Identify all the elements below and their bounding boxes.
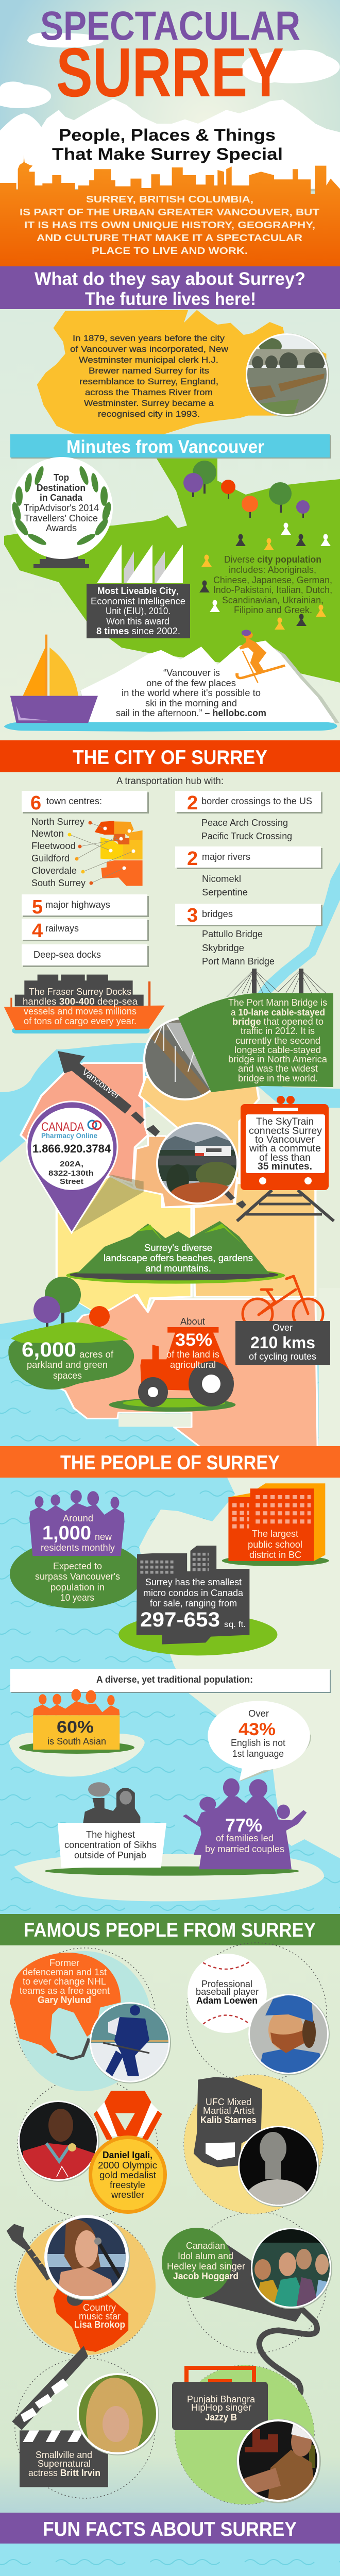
people icons (199, 522, 331, 630)
diverse population text: Chinese, Japanese, German, (213, 575, 332, 585)
card: 2 major rivers: major rivers (202, 852, 250, 862)
panel: famous people (0, 1914, 340, 2513)
person: Kalib Starnes: UFC Mixed (206, 2097, 251, 2107)
diverse population text: Diverse city population (224, 554, 321, 565)
ski mountain and quote: one of the few places (146, 678, 236, 688)
award badge: Travellers' Choice (24, 513, 98, 523)
cycling routes box: Over (273, 1323, 293, 1333)
town centre names: South Surrey (31, 878, 86, 888)
person: Jazzy B (172, 2365, 321, 2504)
new residents stat: new (95, 1532, 112, 1542)
card: 5 major highways: 5 (32, 896, 43, 918)
award badge: Destination (37, 483, 86, 493)
white sails building (97, 545, 183, 583)
person: Jacob Hoggard: Jacob Hoggard (173, 2271, 239, 2281)
award badge: Awards (46, 523, 77, 533)
person: Jazzy B: HipHop singer (191, 2402, 251, 2413)
bubble: 43% English (208, 1701, 311, 1781)
banner: diverse population: A diverse, yet traditional population: (96, 1674, 253, 1685)
SkyTrain icon: 35 minutes. (258, 1161, 312, 1172)
parkland stat with trees: spaces (53, 1370, 82, 1381)
logo: Canada Pharmacy Online (41, 1120, 101, 1140)
heading band (0, 266, 340, 309)
card: 3 bridges: bridges (202, 909, 233, 919)
diverse population text: Indo-Pakistani, Italian, Dutch, (213, 585, 332, 595)
guitar (7, 2224, 128, 2352)
lower island (14, 1854, 324, 1901)
green mountain landscape: Surrey's diverse (144, 1243, 212, 1253)
yellow map with history text: resemblance to Surrey, England, (79, 377, 218, 386)
new residents stat (10, 1490, 144, 1608)
yellow map with history text: of Vancouver was incorporated, New (70, 345, 228, 354)
clouds (0, 32, 340, 108)
card: deep-sea docks: Deep-sea docks (33, 950, 101, 960)
bubble: 43% English: 1st language (232, 1749, 284, 1759)
intro text: IS PART OF THE URBAN GREATER VANCOUVER, BUT (20, 207, 319, 217)
town centre names: Newton (31, 828, 64, 839)
bubble: 43% English: English is not (231, 1738, 285, 1748)
heading: Minutes from Vancouver: Minutes from Vancouver (66, 437, 264, 457)
person: Daniel Igali: wrestler (111, 2190, 144, 2200)
person: Gary Nylund: Former (49, 1958, 79, 1968)
ski mountain and quote: ski in the morning and (145, 698, 237, 708)
dotted rings (14, 1943, 327, 2504)
town centre names: North Surrey (31, 817, 84, 827)
heading band: FUN FACTS ABOUT SURREY (43, 2518, 297, 2540)
bridges list: Port Mann Bridge (202, 956, 275, 967)
yellow map with history text: recognised city in 1993. (98, 410, 200, 419)
ski mountain and quote: sail in the afternoon.” – hellobc.com (116, 708, 266, 718)
boxing glove (194, 2077, 262, 2167)
parkland stat with trees (8, 1277, 134, 1389)
panel: the city of Surrey (0, 740, 340, 1449)
card: 2 border crossings (175, 791, 322, 814)
town centre names: Guildford (31, 853, 70, 863)
person: Gary Nylund: Gary Nylund (38, 1995, 91, 2005)
card: 6 town centres: 6 (30, 792, 41, 814)
person: Lisa Brokop (7, 2215, 156, 2355)
new residents stat: Expected to (53, 1561, 102, 1571)
tractor and agriculture stat: agricultural (170, 1360, 216, 1370)
most liveable city box: 8 times since 2002. (96, 626, 180, 636)
micro condos buildings: micro condos in Canada (143, 1588, 244, 1598)
person: Gary Nylund: teams as a free agent (20, 1986, 110, 1996)
Port Mann Bridge panel: currently the second (235, 1036, 320, 1046)
micro condos buildings: 297-653 (140, 1608, 220, 1631)
crossings list: Peace Arch Crossing (201, 818, 288, 828)
person: Daniel Igali: 2000 Olympic (98, 2160, 157, 2171)
town centre names: Cloverdale (31, 866, 77, 876)
intro text (20, 194, 319, 256)
bridges list (202, 929, 275, 967)
Port Mann Bridge panel: a 10-lane cable-stayed (231, 1007, 325, 1018)
boombox (172, 2368, 268, 2430)
diverse population text (213, 554, 332, 615)
ski mountain and quote: “Vancouver is (163, 668, 220, 678)
person: Daniel Igali: Daniel Igali, (103, 2150, 152, 2160)
person: Gary Nylund (10, 1951, 171, 2091)
subtitle: People, Places & Things (59, 126, 276, 144)
person: Daniel Igali (18, 2091, 167, 2214)
person: Jazzy B: Punjabi Bhangra (187, 2394, 256, 2404)
person: Kalib Starnes: Martial Artist (203, 2106, 254, 2116)
panel: header (0, 0, 340, 268)
Port Mann Bridge panel: bridge that opened to (232, 1016, 324, 1027)
card: 2 major rivers: 2 (187, 848, 198, 870)
heading band: THE PEOPLE OF SURREY (60, 1452, 280, 1474)
ski mountain and quote (80, 630, 339, 723)
person: Britt Irvin: Supernatural (38, 2459, 91, 2469)
cargo ship: The Fraser Surrey Docks (29, 987, 131, 997)
card: 4 railways: 4 (32, 920, 43, 942)
ski mountain and quote: in the world where it's possible to (122, 688, 261, 698)
highest concentration of Sikhs: concentration of Sikhs (64, 1840, 157, 1850)
heading band: What do they say about Surrey? (35, 269, 305, 289)
card: deep-sea docks (22, 944, 149, 967)
family stat: 77%: 77% (225, 1815, 262, 1836)
town centres mini map (68, 821, 143, 886)
Vancouver route arrow: Vancouver (80, 1066, 122, 1101)
heading band: The future lives here! (85, 289, 256, 309)
new residents stat: population in (50, 1582, 105, 1592)
location pin: 8322-130th (48, 1169, 94, 1178)
card: 5 major highways: major highways (45, 900, 110, 910)
diverse population text: Filipino and Greek. (234, 605, 312, 615)
person: Jazzy B: Jazzy B (205, 2412, 237, 2422)
micro condos buildings: for sale, ranging from (150, 1598, 237, 1608)
bridges list: Skybridge (202, 943, 244, 953)
Port Mann Bridge panel: bridge in the world. (238, 1073, 318, 1083)
person: Britt Irvin: actress Britt Irvin (28, 2468, 100, 2478)
family stat: 77%: of families led (216, 1833, 274, 1843)
person: Jacob Hoggard (162, 2227, 332, 2402)
cycling routes box (235, 1321, 330, 1365)
Port Mann Bridge panel: longest cable-stayed (234, 1045, 321, 1055)
SkyTrain icon: of less than (259, 1152, 311, 1163)
SkyTrain icon (237, 1096, 334, 1221)
map of Surrey regions (0, 1043, 340, 1312)
Port Mann Bridge panel: bridge in North America (228, 1054, 328, 1064)
family stat: 77% (183, 1778, 307, 1869)
logo: Canada Pharmacy Online: Pharmacy Online (41, 1131, 97, 1140)
school district building: district in BC (249, 1550, 301, 1560)
stat: 60% South Asian (9, 1689, 145, 1776)
heading band (0, 740, 340, 772)
diverse population text: Scandinavian, Ukrainian, (222, 595, 324, 605)
heading band: THE CITY OF SURREY (73, 747, 267, 769)
orange skyline (0, 155, 340, 267)
person: Kalib Starnes: Kalib Starnes (200, 2115, 257, 2125)
most liveable city box: Won this award (106, 616, 169, 626)
award badge: Top (54, 472, 69, 483)
bridges list: Pattullo Bridge (202, 929, 263, 939)
highest concentration of Sikhs (58, 1782, 166, 1868)
rivers list: Serpentine (202, 887, 248, 897)
school district building: The largest (252, 1529, 298, 1539)
person: Daniel Igali: freestyle (110, 2180, 145, 2190)
Vancouver route arrow (58, 1051, 246, 1209)
crossings list (201, 818, 292, 841)
river (257, 862, 340, 994)
most liveable city box: Unit (EIU), 2010. (106, 606, 171, 616)
most liveable city box: Economist Intelligence (91, 596, 185, 606)
panel: what do they say (0, 266, 340, 742)
person: Gary Nylund: defenceman and 1st (23, 1967, 107, 1977)
new residents stat: 10 years (60, 1592, 94, 1603)
school district building (222, 1483, 329, 1566)
person: Britt Irvin (12, 2346, 159, 2487)
banner: diverse population (10, 1669, 331, 1693)
card: 6 town centres: town centres: (46, 796, 102, 806)
most liveable city box (87, 584, 190, 638)
cycling routes box: of cycling routes (249, 1351, 316, 1362)
location pin (27, 1101, 117, 1233)
bubble: 43% English: Over (248, 1708, 269, 1719)
card: 3 bridges (175, 904, 322, 926)
south land and water (0, 1288, 340, 1449)
yellow map with history text: In 1879, seven years before the city (73, 334, 225, 343)
micro condos buildings: sq. ft. (224, 1620, 246, 1629)
highest concentration of Sikhs: The highest (86, 1829, 135, 1840)
town centre names: Fleetwood (31, 841, 76, 851)
crossings list: Pacific Truck Crossing (201, 831, 292, 841)
card: 4 railways: railways (45, 923, 79, 934)
yellow map with history text: Brewer named Surrey for its (89, 366, 209, 376)
new residents stat: 1,000 (42, 1522, 91, 1544)
heading: Minutes from Vancouver (10, 434, 331, 459)
skier (237, 630, 285, 683)
heading band (0, 1446, 340, 1478)
clapperboard (12, 2346, 108, 2487)
card: 4 railways (22, 919, 149, 942)
cargo ship (4, 975, 165, 1033)
tractor and agriculture stat: About (180, 1316, 205, 1327)
location pin: 202A, (60, 1160, 83, 1168)
photo: SkyTrain (156, 1122, 239, 1208)
yellow map with history text: across the Thames River from (85, 388, 213, 397)
person: Kalib Starnes (184, 2075, 323, 2226)
Port Mann Bridge panel (178, 993, 333, 1092)
person: Jacob Hoggard: Canadian (186, 2241, 225, 2251)
subtitle: That Make Surrey Special (52, 145, 283, 163)
panel: fun facts (0, 2513, 340, 2565)
card: 2 major rivers (175, 846, 322, 870)
person: Jacob Hoggard: Hedley lead singer (167, 2261, 245, 2272)
award badge (10, 457, 113, 568)
parkland stat with trees: 6,000 (22, 1338, 76, 1361)
SkyTrain icon: to Vancouver (255, 1134, 315, 1145)
location pin: 1.866.920.3784 (32, 1142, 111, 1155)
logo: Canada Pharmacy Online: CANADA (41, 1120, 84, 1134)
person: Lisa Brokop: Lisa Brokop (74, 2319, 125, 2330)
stat: 60% South Asian: is South Asian (47, 1736, 106, 1747)
heading band (0, 2513, 340, 2544)
award badge: in Canada (40, 493, 83, 503)
Port Mann Bridge panel: and was the widest (238, 1063, 318, 1074)
tractor and agriculture stat: of the land is (166, 1349, 219, 1360)
intro text: PLACE TO LIVE AND WORK. (92, 246, 248, 256)
cargo ship: handles 300-400 deep-sea (23, 996, 138, 1007)
parkland stat with trees: parkland and green (27, 1360, 108, 1370)
yellow map with history text (37, 310, 326, 434)
card: 2 border crossings: border crossings to the US (201, 796, 312, 806)
mountains (0, 99, 340, 191)
cargo ship: of tons of cargo every year. (24, 1016, 137, 1026)
trees on map (183, 461, 310, 518)
gold medal (89, 2091, 167, 2214)
micro condos buildings (118, 1546, 277, 1655)
panel: the people of Surrey (0, 1446, 340, 1916)
bridge towers (227, 969, 326, 997)
subtitle (52, 126, 283, 163)
tractor and agriculture stat (109, 1316, 235, 1412)
Port Mann Bridge panel: traffic in 2012. It is (241, 1026, 315, 1036)
person: Adam Loewen: Adam Loewen (196, 1995, 258, 2006)
intro text: SURREY, BRITISH COLUMBIA, (86, 194, 253, 205)
yellow map with history text: Westminster municipal clerk H.J. (79, 355, 218, 365)
person: Britt Irvin: Smallville and (36, 2450, 92, 2460)
sailboat and water (4, 635, 337, 732)
SkyTrain icon: connects Surrey (249, 1125, 322, 1137)
diverse population text: includes: Aboriginals, (229, 565, 316, 575)
rivers list (202, 874, 248, 897)
person: Daniel Igali: gold medalist (99, 2170, 156, 2180)
photo: Port Mann Bridge (143, 1018, 211, 1100)
parkland stat with trees: acres of (79, 1349, 114, 1360)
person: Adam Loewen: Professional (201, 1979, 252, 1989)
new residents stat: surpass Vancouver's (35, 1571, 120, 1582)
card: 3 bridges: 3 (187, 905, 198, 926)
green map (4, 459, 340, 683)
tractor and agriculture stat: 35% (175, 1330, 212, 1350)
transportation intro: A transportation hub with: (116, 776, 224, 787)
person: Gary Nylund: to ever change NHL (23, 1976, 106, 1987)
micro condos buildings: Surrey has the smallest (145, 1577, 242, 1587)
rivers list: Nicomekl (202, 874, 241, 884)
card: 5 major highways (22, 894, 149, 918)
award badge: TripAdvisor's 2014 (24, 503, 99, 513)
title: Spectacular: SPECTACULAR (40, 3, 300, 48)
baseball stitches (203, 1962, 249, 2024)
new residents stat: residents monthly (41, 1543, 115, 1553)
bicycle (243, 1276, 323, 1329)
person: Adam Loewen (188, 1954, 330, 2076)
person: Lisa Brokop: Country (83, 2302, 116, 2313)
school district building: public school (248, 1539, 302, 1550)
Port Mann Bridge panel: The Port Mann Bridge is (228, 997, 327, 1008)
heading band (0, 1914, 340, 1945)
SkyTrain icon: with a commute (249, 1143, 321, 1154)
intro text: IT IS HAS ITS OWN UNIQUE HISTORY, GEOGRAPHY, (24, 220, 315, 230)
new residents stat: Around (63, 1513, 93, 1523)
laurel leaves (10, 465, 113, 547)
location pin: Street (60, 1177, 83, 1186)
microphone (162, 2228, 317, 2402)
title: Surrey: SURREY (56, 33, 284, 111)
green mountain landscape: landscape offers beaches, gardens (104, 1253, 253, 1263)
SkyTrain icon: The SkyTrain (256, 1116, 314, 1127)
bubble: 43% English: 43% (239, 1720, 276, 1739)
highest concentration of Sikhs: outside of Punjab (74, 1850, 146, 1860)
green mountain landscape (66, 1221, 285, 1284)
intro text: AND CULTURE THAT MAKE IT A SPECTACULAR (37, 233, 302, 243)
most liveable city box: Most Liveable City, (97, 586, 179, 596)
person: Lisa Brokop: music star (79, 2311, 121, 2321)
card: 2 border crossings: 2 (187, 792, 198, 814)
family stat: 77%: by married couples (205, 1844, 284, 1854)
photo: Thames bridge (246, 333, 330, 417)
card: 6 town centres (22, 791, 149, 814)
yellow map with history text: Westminster. Surrey became a (84, 399, 214, 408)
town centre names (31, 817, 86, 888)
green mountain landscape: and mountains. (145, 1263, 211, 1274)
stat: 60% South Asian: 60% (57, 1718, 94, 1736)
cycling routes box: 210 kms (250, 1333, 315, 1352)
person: Adam Loewen: baseball player (196, 1987, 259, 1997)
person: Jacob Hoggard: Idol alum and (178, 2251, 233, 2261)
cargo ship: vessels and moves millions (24, 1006, 137, 1016)
